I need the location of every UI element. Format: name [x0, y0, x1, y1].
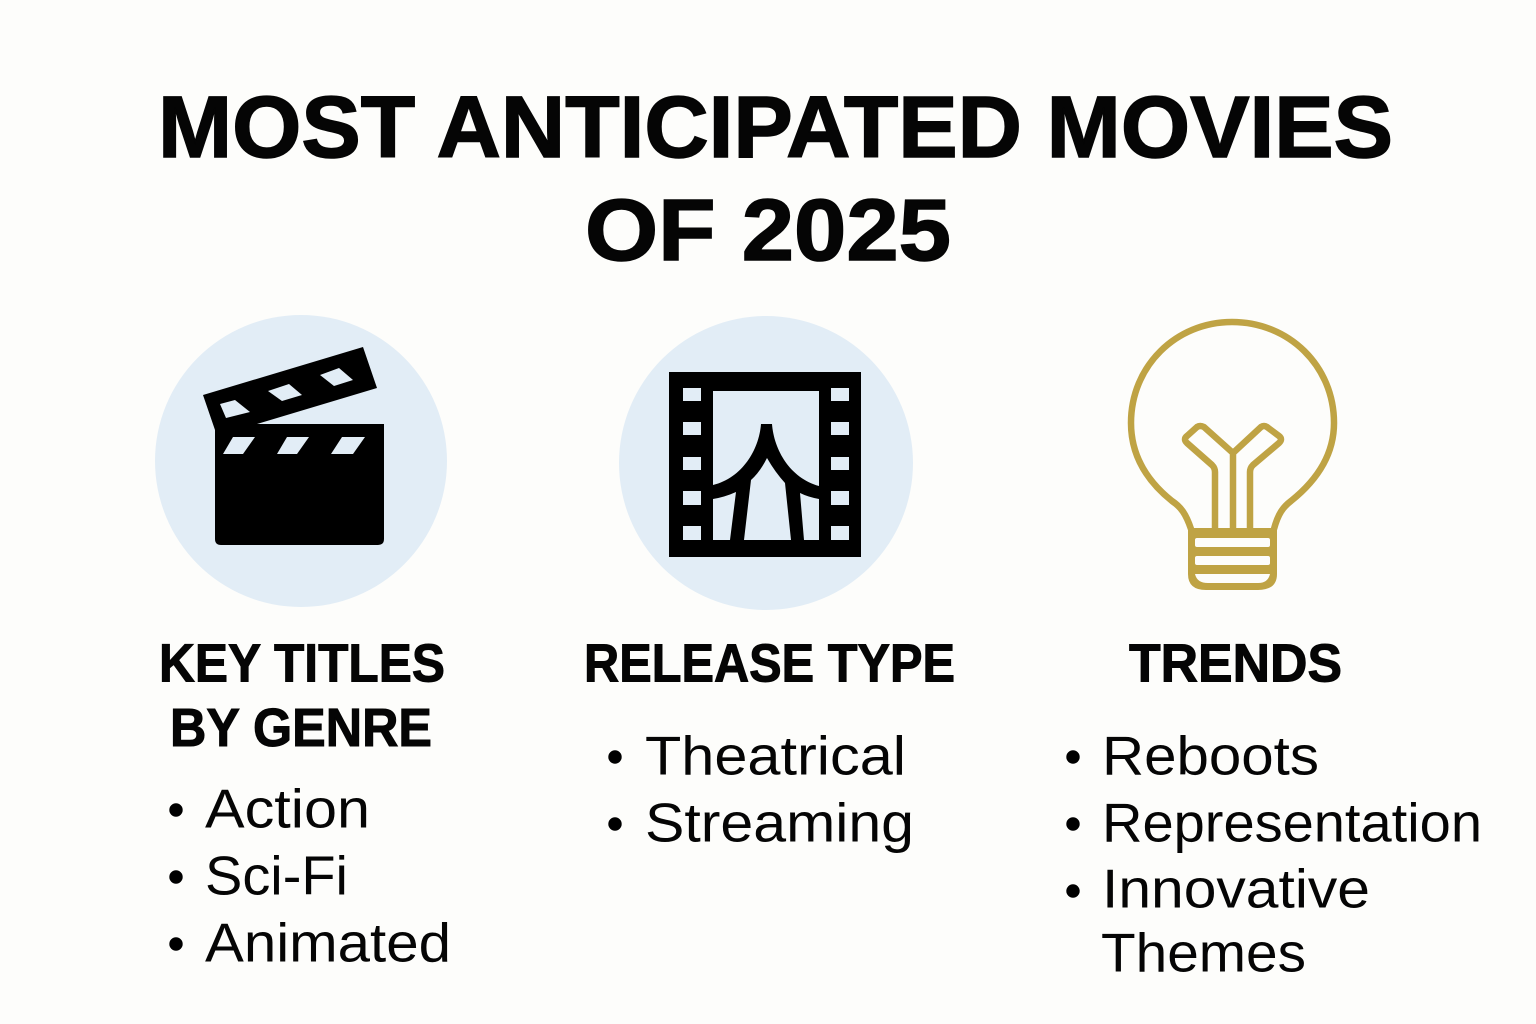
list: trends: Reboots: [1102, 724, 1319, 786]
column: key titles by genre: [159, 634, 451, 974]
list: trends: Representation: [1102, 792, 1482, 854]
title: MOST ANTICIPATED MOVIES: [158, 79, 1393, 176]
list: genres: Sci-Fi: [205, 844, 348, 906]
icon: film strip with curtains: [619, 316, 913, 610]
list: release types: Theatrical: [645, 724, 906, 786]
list: genres: Animated: [205, 912, 451, 974]
list: release types: [608, 724, 914, 854]
heading: key titles by genre: BY GENRE: [170, 698, 432, 758]
icon: light bulb: [1131, 322, 1334, 590]
list: genres: Action: [205, 778, 370, 840]
heading: key titles by genre: [159, 634, 445, 758]
list: genres: [169, 778, 451, 974]
heading: key titles by genre: KEY TITLES: [159, 634, 445, 694]
list: release types: Streaming: [645, 792, 914, 854]
column: release type: [584, 634, 955, 854]
heading: release type: RELEASE TYPE: [584, 634, 955, 694]
list: trends: Innovative: [1102, 858, 1370, 920]
heading: trends: TRENDS: [1129, 634, 1342, 694]
title: [158, 79, 1393, 279]
icon: clapperboard: [155, 315, 447, 607]
column: trends: [1066, 634, 1482, 984]
list: trends: Themes: [1101, 922, 1306, 984]
list: trends: [1066, 724, 1482, 984]
title: OF 2025: [585, 182, 951, 279]
